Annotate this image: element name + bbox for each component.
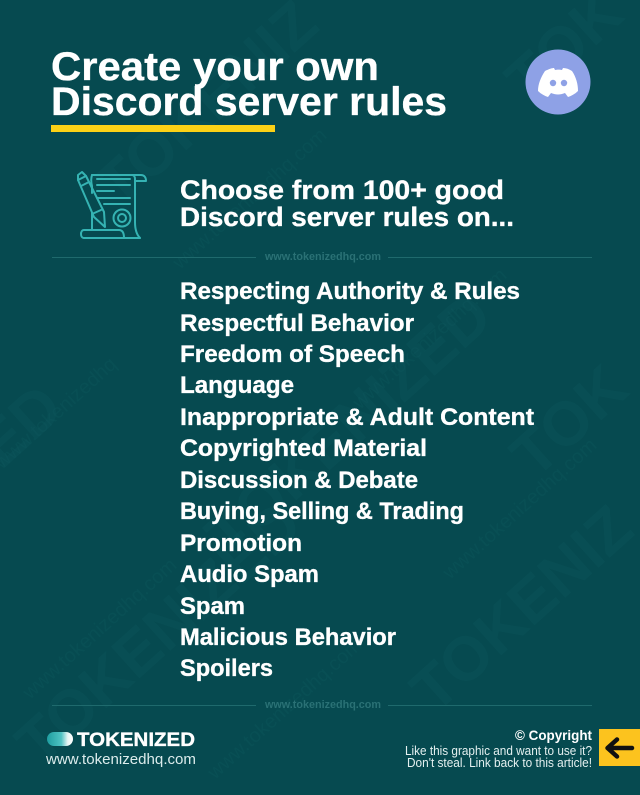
title: Discord server rules — [51, 80, 447, 124]
copyright notice: Don't steal. Link back to this article! — [407, 756, 592, 770]
copyright notice — [405, 727, 592, 770]
list of rule topics: Audio Spam — [180, 561, 319, 588]
background watermark: TOKENIZED — [3, 488, 315, 778]
icon: scroll with pen — [78, 172, 146, 238]
list of rule topics: Copyrighted Material — [180, 435, 427, 462]
subheading — [180, 175, 514, 232]
background watermark: www.tokenizedhq.com — [203, 634, 366, 784]
list of rule topics: Spam — [180, 593, 245, 620]
list of rule topics: Buying, Selling & Trading — [180, 498, 464, 525]
copyright notice: Like this graphic and want to use it? — [405, 744, 592, 758]
list of rule topics: Spoilers — [180, 655, 273, 682]
back arrow button — [599, 729, 640, 766]
list of rule topics: Freedom of Speech — [180, 341, 405, 368]
background watermark: www.tokenizedhq.com — [168, 124, 331, 274]
list of rule topics: Respecting Authority & Rules — [180, 278, 520, 305]
footer logo: www.tokenizedhq.com — [45, 751, 196, 768]
title underline — [51, 125, 275, 132]
divider with site url: www.tokenizedhq.com — [264, 251, 381, 263]
list of rule topics: Language — [180, 372, 294, 399]
background watermark: www.tokenizedhq.com — [348, 264, 511, 414]
subheading: Choose from 100+ good — [180, 175, 504, 205]
list of rule topics: Malicious Behavior — [180, 624, 396, 651]
copyright notice: © Copyright — [515, 727, 592, 743]
background watermark: TOKENIZED — [193, 280, 505, 570]
background watermark: TOKENIZ — [398, 493, 640, 725]
background watermark: TOK — [498, 352, 640, 490]
background watermark: www.tokenizedhq.com — [18, 554, 181, 704]
divider with site url: www.tokenizedhq.com — [264, 699, 381, 711]
background watermark: www.tokenizedhq.com — [438, 434, 601, 584]
list of rule topics: Respectful Behavior — [180, 310, 414, 337]
subheading: Discord server rules on... — [180, 202, 514, 232]
list of rule topics: Inappropriate & Adult Content — [180, 404, 534, 431]
icon: discord logo — [526, 50, 590, 114]
footer logo: TOKENIZED — [77, 730, 195, 751]
list of rule topics: Discussion & Debate — [180, 467, 418, 494]
list of rule topics: Promotion — [180, 530, 302, 557]
footer logo — [45, 730, 196, 768]
title — [51, 45, 447, 124]
list of rule topics — [180, 278, 534, 682]
title: Create your own — [51, 45, 379, 89]
